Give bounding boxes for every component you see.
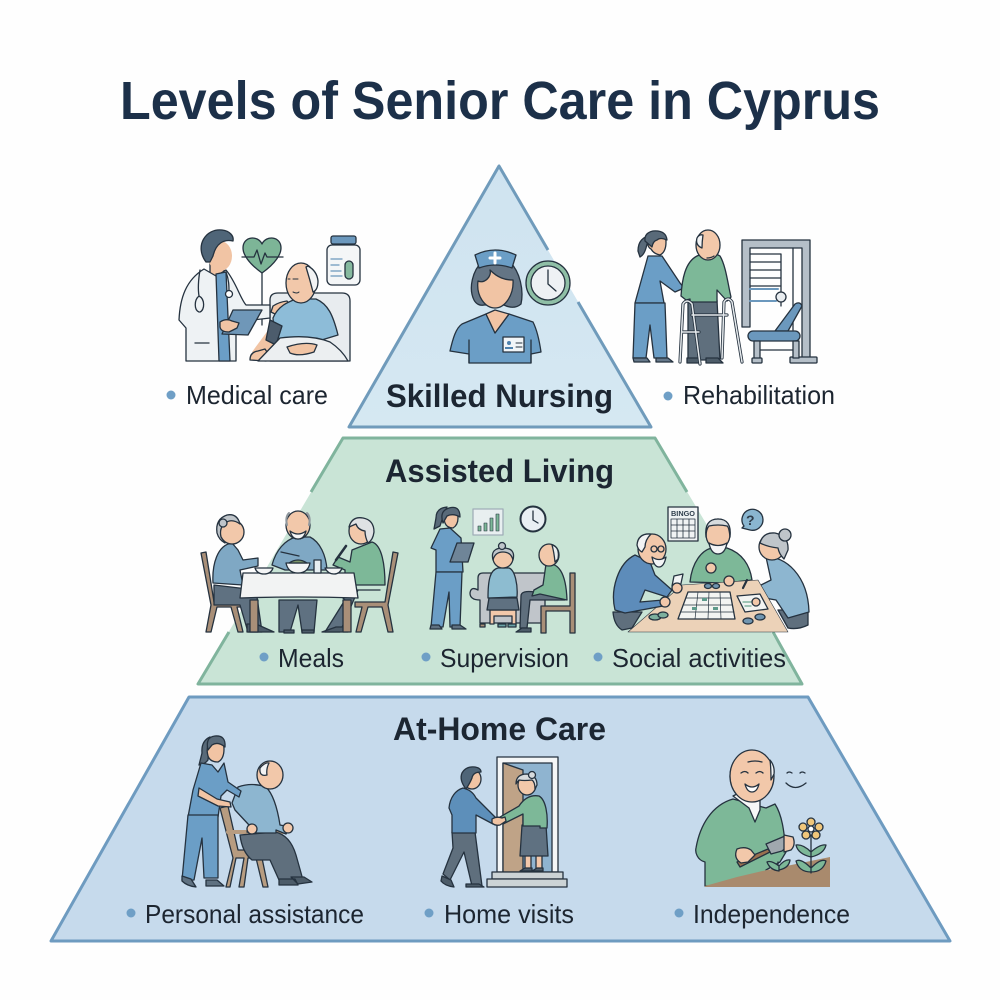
table xyxy=(250,600,258,632)
seated man xyxy=(520,592,565,628)
patient xyxy=(271,301,291,315)
gym frame xyxy=(742,240,810,360)
bed xyxy=(270,293,350,361)
trowel xyxy=(766,836,787,854)
nurse scrubs xyxy=(450,314,541,363)
seated man xyxy=(240,832,303,880)
wall chart xyxy=(473,509,503,535)
chair xyxy=(220,806,272,887)
score paper xyxy=(737,594,768,612)
left chair xyxy=(201,552,244,632)
nurse cap xyxy=(475,250,516,268)
label: supervision: Supervision xyxy=(440,643,569,673)
visitor xyxy=(443,832,482,886)
bingo card xyxy=(668,507,698,541)
label: home visits: Home visits xyxy=(444,899,574,929)
chair xyxy=(541,573,575,633)
label: rehabilitation: Rehabilitation xyxy=(683,380,835,410)
hands xyxy=(736,848,755,863)
illustration: social activities: ? xyxy=(746,512,755,528)
left diner xyxy=(214,585,262,632)
medicine bottle xyxy=(331,236,356,244)
question bubble xyxy=(742,509,763,530)
left man xyxy=(614,555,672,613)
label: social activities: Social activities xyxy=(612,643,786,673)
head xyxy=(730,756,747,790)
label: meals: Meals xyxy=(278,643,344,673)
panel: at-home care tier xyxy=(51,697,950,941)
heading: at-home care: At-Home Care xyxy=(393,711,606,747)
illustration: social activities: BINGO xyxy=(671,511,696,518)
collar xyxy=(733,790,760,822)
wall clock xyxy=(520,506,546,532)
host woman xyxy=(525,855,531,869)
door frame xyxy=(497,757,558,872)
steps xyxy=(492,872,563,879)
clipboard xyxy=(450,543,474,562)
illustration: independence xyxy=(696,750,830,887)
patient xyxy=(688,300,720,360)
illustration: supervision xyxy=(430,506,575,633)
heading: skilled nursing: Skilled Nursing xyxy=(386,378,613,414)
walker xyxy=(680,299,742,364)
panel: skilled nursing tier xyxy=(349,166,651,427)
clock xyxy=(526,261,570,305)
right woman xyxy=(778,610,808,629)
id badge xyxy=(503,337,524,352)
nurse hair xyxy=(471,262,522,307)
title: Levels of Senior Care in Cyprus xyxy=(120,71,880,131)
illustration: home visits xyxy=(441,757,567,887)
table xyxy=(628,580,788,632)
open door xyxy=(503,763,523,872)
food xyxy=(286,563,310,573)
illustration: medical care xyxy=(179,230,360,361)
left man pants xyxy=(613,612,642,630)
chips xyxy=(649,614,661,620)
center man xyxy=(690,548,752,583)
illustration: meals xyxy=(201,511,398,633)
supervising nurse xyxy=(434,507,447,529)
label: medical care: Medical care xyxy=(186,380,328,410)
seated woman xyxy=(490,610,516,624)
center diner xyxy=(279,600,317,632)
label: personal assistance: Personal assistance xyxy=(145,899,364,929)
panel: assisted living tier xyxy=(198,438,802,684)
caregiver xyxy=(199,737,213,765)
illustration: social activities xyxy=(613,507,809,632)
bench xyxy=(775,303,802,331)
game board xyxy=(678,592,735,619)
heading: assisted living: Assisted Living xyxy=(385,453,614,489)
tablet xyxy=(222,310,262,335)
flower xyxy=(778,835,811,873)
hands xyxy=(706,563,716,573)
label: independence: Independence xyxy=(693,899,850,929)
heart monitor xyxy=(243,238,281,273)
smile icon xyxy=(786,772,806,788)
sofa xyxy=(470,573,545,623)
soil xyxy=(705,857,830,887)
right chair xyxy=(355,552,398,632)
therapist xyxy=(638,235,652,257)
illustration: personal assistance xyxy=(182,736,312,887)
illustration: nurse and clock xyxy=(450,250,570,363)
right diner xyxy=(325,590,380,632)
doctor xyxy=(210,262,224,276)
nurse face xyxy=(478,270,513,308)
illustration: rehabilitation xyxy=(633,230,817,364)
sweater xyxy=(696,799,786,886)
